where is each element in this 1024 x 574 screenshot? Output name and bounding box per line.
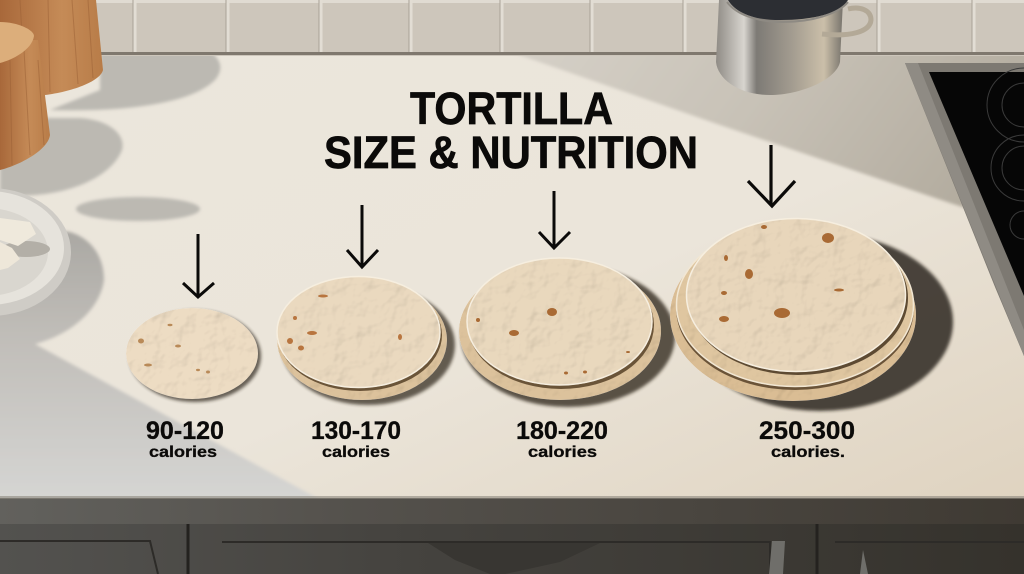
medium tortilla calories bbox=[311, 417, 401, 461]
small tortilla arrow bbox=[183, 234, 214, 297]
lower cabinets bbox=[0, 496, 1024, 574]
steel pot bbox=[716, 0, 871, 95]
large tortilla arrow bbox=[539, 191, 570, 248]
tiled wall backsplash bbox=[0, 0, 1024, 56]
extra large tortilla calories bbox=[759, 417, 855, 461]
large tortilla calories: calories bbox=[528, 444, 597, 461]
large tortilla calories: 180-220 bbox=[516, 417, 608, 445]
countertop bbox=[0, 50, 1024, 500]
medium tortilla calories: 130-170 bbox=[311, 417, 401, 445]
extra large tortilla arrow bbox=[748, 145, 795, 206]
sunlight shadow: lower left bbox=[0, 220, 330, 505]
small tortilla calories: calories bbox=[149, 444, 217, 461]
large tortilla stack bbox=[459, 258, 675, 407]
medium tortilla arrow bbox=[347, 205, 378, 267]
canister shadows bbox=[0, 50, 220, 221]
medium tortilla calories: calories bbox=[322, 444, 390, 461]
plate with wraps bbox=[0, 188, 71, 316]
extra large tortilla calories: 250-300 bbox=[759, 417, 855, 445]
extra large tortilla calories: calories. bbox=[771, 444, 845, 461]
title: SIZE & NUTRITION bbox=[324, 127, 698, 178]
small tortilla calories bbox=[146, 417, 224, 461]
title: TORTILLA bbox=[410, 83, 613, 134]
wooden canisters bbox=[0, 0, 103, 170]
sunlight shadow: upper right bbox=[505, 50, 1024, 232]
extra large tortilla stack bbox=[670, 218, 953, 411]
large tortilla calories bbox=[516, 417, 608, 461]
small tortilla bbox=[126, 308, 261, 402]
small tortilla calories: 90-120 bbox=[146, 417, 224, 445]
induction cooktop bbox=[905, 63, 1024, 356]
title bbox=[324, 83, 698, 178]
medium tortilla stack bbox=[276, 276, 455, 405]
